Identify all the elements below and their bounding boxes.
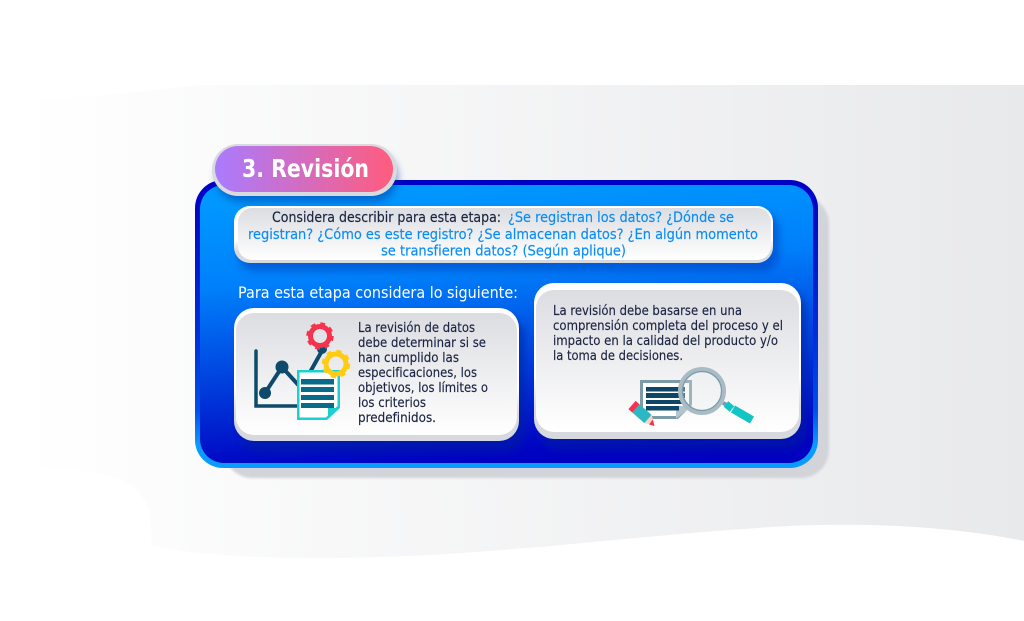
question text: ¿Se registran los datos? ¿Dónde se [508,210,734,226]
question text [248,210,758,260]
question text: Considera describir para esta etapa: [272,210,501,226]
question text: registran? ¿Cómo es este registro? ¿Se almacenan datos? ¿En algún momento [248,227,758,243]
question text: se transfieren datos? (Según aplique) [381,244,626,260]
icon: yellow gear [324,352,348,376]
left card text: objetivos, los límites o [358,381,488,396]
left card text: predefinidos. [358,411,436,426]
icon: document with magnifier and pencil [628,370,752,426]
title text: 3. Revisión [242,154,369,183]
right card text: comprensión completa del proceso y el [553,319,783,334]
icon: document [297,370,340,420]
left card [234,308,525,452]
left card text: especificaciones, los [358,366,477,381]
right card text [553,304,783,364]
icon: document [640,380,692,419]
icon: pencil [628,401,654,426]
right card text: impacto en la calidad del producto y/o [553,334,778,349]
right card text: La revisión debe basarse en una [553,304,742,319]
icon: magnifier [680,370,752,420]
icon: red gear [308,324,332,348]
title pill [212,144,398,202]
right card text: la toma de decisiones. [553,349,683,364]
main panel shadow [224,196,829,478]
left card text: han cumplido las [358,351,459,366]
left card text: debe determinar si se [358,336,486,351]
left card text: La revisión de datos [358,321,475,336]
background wave shape [20,85,1024,558]
left card text: los criterios [358,396,426,411]
icon: chart with gears and document [256,324,348,420]
left card text [358,321,488,426]
main blue panel [195,180,818,468]
subheading: Para esta etapa considera lo siguiente: [238,283,518,302]
question box [234,206,779,271]
right card [534,283,807,450]
